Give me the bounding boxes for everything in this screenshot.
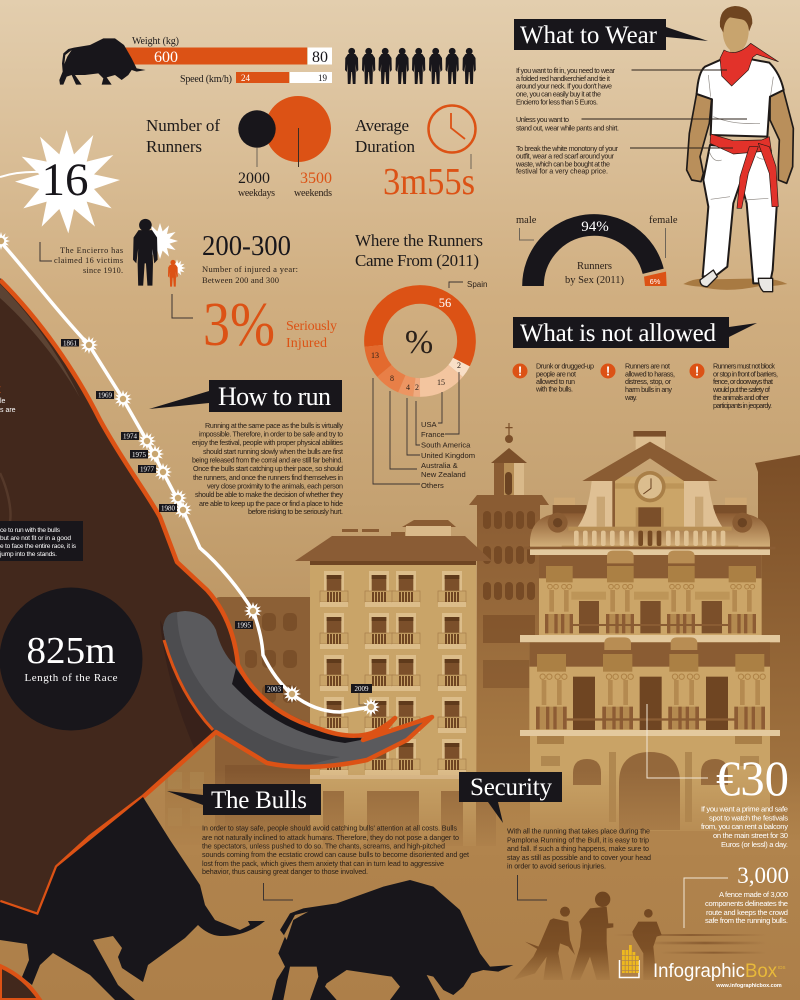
donut chart: 15 xyxy=(437,378,445,387)
t-shirt xyxy=(697,59,784,137)
runners by sex gauge: Runners xyxy=(577,261,612,272)
how to run heading: How to run xyxy=(218,382,331,411)
how to run text: Running at the same pace as the bulls is virtually xyxy=(205,421,343,430)
icon: charging bull xyxy=(59,38,146,85)
how to run text: impossible. Therefore, in order to be safe and try to xyxy=(199,430,343,438)
bull icon and weight and speed bars: Weight (kg) xyxy=(132,36,179,47)
donut legend: USA xyxy=(421,420,438,429)
the bulls text: In order to stay safe, people should avoid catching bulls' attention at all costs. Bulls xyxy=(202,824,457,832)
cropped note on bull head xyxy=(0,382,16,414)
balcony price callout: €30 xyxy=(716,750,789,806)
building: town hall ground floor xyxy=(530,736,770,831)
hair xyxy=(720,6,752,33)
route line with year markers: 1861 xyxy=(63,340,78,348)
what to wear text: waste, which can be bought at the xyxy=(515,160,610,168)
cropped note on bull head: s are xyxy=(0,407,16,414)
race length circle xyxy=(0,588,142,730)
what to wear text: Encierro for less than 5 Euros. xyxy=(516,98,598,106)
runners by sex gauge: by Sex (2011) xyxy=(565,275,624,286)
victims note: claimed 16 victims xyxy=(54,256,123,265)
what to wear text: around your neck. If you don't have xyxy=(516,82,612,90)
injured stats: Number of injured a year: xyxy=(202,264,298,274)
rule: no blocking: would put the safety of xyxy=(712,385,770,394)
fence callout: A fence made of 3,000 xyxy=(719,890,788,899)
building: right dark block xyxy=(755,455,800,840)
what to wear text: outfit, wear a red scarf around your xyxy=(516,152,615,160)
how to run text: before risking to be seriously hurt. xyxy=(248,507,343,516)
man illustration xyxy=(683,6,793,292)
route line with year markers: 2009 xyxy=(354,685,369,693)
race length circle: 825m xyxy=(26,630,116,672)
black note box: ce to run with the bulls xyxy=(0,527,61,534)
rule: no drunk people: with the bulls. xyxy=(535,384,573,394)
what to wear text: one, you can easily buy it at the xyxy=(516,90,601,98)
bull icon and weight and speed bars: 24 xyxy=(241,73,250,83)
race length circle: Length of the Race xyxy=(24,672,118,684)
runners by sex gauge: 94% xyxy=(581,219,609,235)
route line with year markers: 1974 xyxy=(123,432,138,440)
cropped note on bull head: le xyxy=(0,398,6,405)
ground shadow xyxy=(683,278,787,290)
donut legend xyxy=(373,280,487,490)
injured stats: Injured xyxy=(286,336,327,351)
what to wear text: stand out, wear while pants and shirt. xyxy=(516,124,619,132)
pants xyxy=(703,145,777,283)
balcony price callout: on the main street for 30 xyxy=(713,831,788,840)
rule: no harassing bulls xyxy=(600,362,675,402)
sash tail right xyxy=(758,143,778,207)
building: town hall xyxy=(520,431,780,736)
donut legend: South America xyxy=(421,440,471,450)
route line with year markers: 1977 xyxy=(140,466,154,474)
donut chart: 13 xyxy=(371,351,379,360)
how to run text: are able to keep up the pace or find a place to hide xyxy=(199,499,343,508)
route line with year markers: 1975 xyxy=(132,451,146,459)
donut legend: Australia & xyxy=(421,461,458,470)
donut chart: 2 xyxy=(415,383,419,392)
rule: no harassing bulls: ! xyxy=(606,364,610,378)
black note box: but are not fit or in a good xyxy=(0,535,71,542)
balcony price callout xyxy=(647,704,789,849)
donut legend: Others xyxy=(421,481,444,490)
rule: no drunk people: allowed to run xyxy=(536,377,575,386)
rule: no drunk people xyxy=(512,362,594,394)
neck and face xyxy=(723,14,749,57)
what is not allowed heading: What is not allowed xyxy=(520,320,716,347)
neck scarf xyxy=(720,43,778,86)
runners by sex gauge xyxy=(516,215,678,286)
building: left dim block xyxy=(165,597,312,845)
the bulls text: behavior, thus causing great danger to those involved. xyxy=(202,867,368,876)
number of runners: Runners xyxy=(146,137,202,156)
route line with year markers: 2003 xyxy=(267,686,282,694)
rule: no harassing bulls: harm bulls in any xyxy=(625,385,672,394)
black note box xyxy=(0,521,83,561)
where runners came from heading: Where the Runners xyxy=(355,231,483,250)
bull silhouette: bottom left xyxy=(0,797,265,1000)
runners silhouettes xyxy=(513,892,767,980)
rule: no blocking: ! xyxy=(695,364,699,378)
rule: no drunk people: ! xyxy=(518,364,522,378)
runners by sex gauge: female xyxy=(649,215,678,226)
what to wear text: To break the white monotony of your xyxy=(516,144,619,153)
runners by sex gauge: male xyxy=(516,215,537,226)
average duration xyxy=(355,106,476,203)
what to wear pointers xyxy=(582,70,747,148)
how to run text xyxy=(192,421,343,516)
bull silhouette: bottom centre xyxy=(272,880,513,1000)
route line with year markers: 1980 xyxy=(161,504,176,512)
balcony price callout: If you want a prime and safe xyxy=(701,804,788,814)
average duration: Duration xyxy=(355,137,416,156)
the bulls text: the spectators, unless pushed to do so. The chants, screams, and high-pitched xyxy=(202,842,445,850)
bull icon and weight and speed bars: 80 xyxy=(312,49,328,66)
where runners came from heading: Came From (2011) xyxy=(355,251,479,270)
number of runners: weekdays xyxy=(238,188,275,199)
rule: no blocking: participants in jeopardy. xyxy=(713,401,772,410)
bull icon and weight and speed bars: 19 xyxy=(318,73,328,83)
rule: no blocking: or stop in front of barriers, xyxy=(713,370,778,378)
security text: With all the running that takes place during the xyxy=(507,826,650,836)
fence callout: components delineates the xyxy=(705,899,788,908)
rule: no harassing bulls: way. xyxy=(624,393,637,402)
building: central apartment block xyxy=(295,520,496,846)
bull head outline xyxy=(0,280,432,915)
victims note: The Encierro has xyxy=(60,246,123,255)
number of runners: 2000 xyxy=(238,170,270,187)
victims note: since 1910. xyxy=(83,266,123,275)
fence callout: route and keeps the crowd xyxy=(706,908,788,917)
donut legend: France xyxy=(421,430,445,439)
donut chart: 56 xyxy=(439,296,451,310)
donut chart xyxy=(371,294,466,392)
security text: and fall. If such a thing happens, make sure to xyxy=(507,844,649,853)
the bulls text: lost from the pack, which gives them anxiety that can in turn lead to aggressive xyxy=(202,859,444,868)
route line with year markers: 1969 xyxy=(98,392,112,400)
rule: no harassing bulls: allowed to harass, xyxy=(625,370,675,378)
balcony price callout: from, you can rent a balcony xyxy=(701,822,788,831)
victims starburst xyxy=(15,130,120,233)
number of runners: weekends xyxy=(294,188,332,199)
how to run text: enjoy the festival, people with proper physical abilities xyxy=(192,438,343,447)
the bulls heading xyxy=(167,784,321,815)
logo: IDS xyxy=(778,965,786,970)
the bulls text: sounds coming from the ecstatic crowd can cause bulls to become disoriented and get xyxy=(202,850,469,859)
injured stats xyxy=(172,230,337,359)
security heading: Security xyxy=(470,774,552,801)
black note box: jump into the stands. xyxy=(0,551,57,558)
what to wear heading: What to Wear xyxy=(520,22,658,49)
bull icon and weight and speed bars: Speed (km/h) xyxy=(180,74,232,85)
rule: no drunk people: people are not xyxy=(536,370,576,378)
number of runners xyxy=(146,96,332,199)
bull horn xyxy=(163,611,432,767)
arms xyxy=(687,90,793,183)
runners by sex gauge: 6% xyxy=(650,277,661,286)
rule: no drunk people: Drunk or drugged-up xyxy=(536,362,594,370)
how to run text: should be able to make the decision of whether they xyxy=(195,490,343,499)
eight men silhouettes xyxy=(345,48,476,84)
injured stats: Between 200 and 300 xyxy=(202,275,279,285)
how to run heading xyxy=(149,380,342,412)
rule: no blocking xyxy=(690,362,778,410)
security text: stay as still as possible and to cover your head xyxy=(507,853,651,862)
balcony price callout: spot to watch the festivals xyxy=(709,814,788,822)
bull icon and weight and speed bars xyxy=(59,36,332,85)
what to wear text xyxy=(515,66,619,176)
victims note xyxy=(40,242,123,275)
black note box: e to face the entire race, it is xyxy=(0,543,77,550)
injured stats: 200-300 xyxy=(202,230,291,262)
number of runners: 3500 xyxy=(300,170,332,187)
donut legend: Spain xyxy=(467,280,487,289)
bull head corner bottom left xyxy=(0,966,40,1000)
building: bell tower xyxy=(469,423,549,835)
fence callout: safe from the running bulls. xyxy=(705,916,788,925)
rule: no blocking: the animals and other xyxy=(713,393,770,402)
bull head xyxy=(0,278,432,915)
the bulls heading: The Bulls xyxy=(211,787,307,814)
what to wear text: a folded red handkerchief and tie it xyxy=(516,74,610,83)
the bulls text xyxy=(202,824,469,900)
average duration: Average xyxy=(355,116,409,135)
what to wear heading xyxy=(514,19,708,50)
rule: no blocking: fence, or doorways that xyxy=(713,377,773,386)
donut chart: 2 xyxy=(457,361,461,370)
security heading xyxy=(459,772,562,823)
bull icon and weight and speed bars: 600 xyxy=(154,49,178,66)
what is not allowed heading xyxy=(513,317,757,348)
shoes xyxy=(700,270,773,292)
donut chart: % xyxy=(405,324,433,361)
security text xyxy=(507,826,651,900)
how to run text: should start running slowly when the bulls are first xyxy=(203,447,343,456)
how to run text: Once the bulls start catching up their pace, so should xyxy=(193,464,343,473)
security text: in order to avoid serious injuries. xyxy=(507,862,606,870)
number of runners: Number of xyxy=(146,116,220,135)
fence callout: 3,000 xyxy=(737,863,789,888)
waist sash xyxy=(710,134,771,154)
how to run text: very close proximity to the animals, each person xyxy=(207,482,343,490)
rule: no harassing bulls: distress, stop, or xyxy=(625,377,672,386)
what to wear text: Unless you want to xyxy=(516,115,569,124)
icon: clock xyxy=(428,106,476,152)
rule: no harassing bulls: Runners are not xyxy=(625,362,670,370)
logo: www.infographicbox.com xyxy=(715,983,782,989)
logo xyxy=(620,945,786,989)
where runners came from heading xyxy=(355,231,483,270)
logo: InfographicBox xyxy=(653,960,777,982)
sash tail left xyxy=(737,147,758,208)
security text: Pamplona Running of the Bull, it is easy to trip xyxy=(507,836,649,844)
victims starburst: 16 xyxy=(42,154,88,206)
what to wear text: If you want to fit in, you need to wear xyxy=(516,66,616,75)
donut chart: 8 xyxy=(390,374,394,383)
injured stats: 3% xyxy=(203,291,275,359)
the bulls text: are not naturally inclined to attack humans. Therefore, they do not pose a danger to xyxy=(202,833,459,842)
how to run text: being released from the corral and are still far behind. xyxy=(192,456,343,464)
ground fade xyxy=(150,770,800,855)
rule: no blocking: Runners must not block xyxy=(713,362,775,370)
how to run text: the runners, and once the runners find themselves in xyxy=(193,473,343,482)
fence callout xyxy=(684,863,789,928)
injured stats: Seriously xyxy=(286,319,337,334)
donut legend: United Kingdom xyxy=(421,451,475,460)
balcony price callout: Euros (or lessl) a day. xyxy=(721,840,788,849)
route line with year markers: 1995 xyxy=(237,622,252,630)
injured people icons xyxy=(133,219,186,287)
donut legend: New Zealand xyxy=(421,470,466,479)
donut chart: 4 xyxy=(406,383,410,392)
average duration: 3m55s xyxy=(383,161,475,203)
what to wear text: festival for a very cheap price. xyxy=(516,166,608,176)
route line with year markers xyxy=(0,172,380,716)
